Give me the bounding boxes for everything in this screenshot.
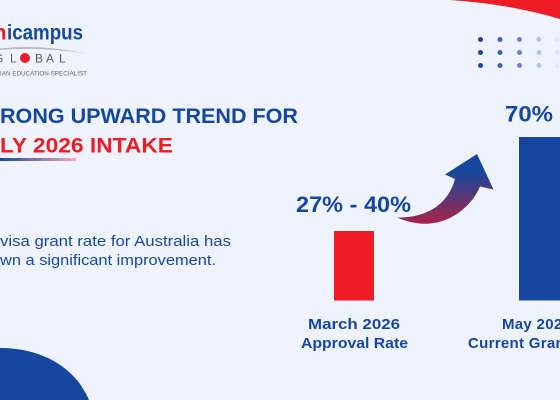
- label: March: [301, 316, 408, 352]
- title line 1: RONG UPWARD TREND FOR: [0, 105, 298, 128]
- body text: [0, 233, 231, 269]
- logo tagline: IAN EDUCATION SPECIALIST: [0, 70, 87, 78]
- body line 2: wn a significant improvement.: [0, 252, 216, 269]
- title underline: [0, 158, 76, 161]
- corner shape: top-right red arc: [450, 0, 560, 19]
- logo swoosh: [0, 47, 86, 54]
- label: March: March 2026: [308, 316, 400, 333]
- label: March: Approval Rate: [301, 335, 408, 352]
- value: March: 27% - 40%: [296, 192, 411, 217]
- logo wordmark: icampus: [7, 22, 83, 44]
- title line 2: LY 2026 INTAKE: [0, 134, 173, 158]
- dot grid: [478, 37, 560, 68]
- corner shape: bottom-left blue circle: [0, 348, 89, 400]
- arrow: [397, 154, 494, 224]
- title: [0, 105, 298, 158]
- logo globe: [20, 53, 30, 63]
- label: May: [468, 316, 560, 352]
- logo: [0, 22, 87, 78]
- value: May: 70%: [505, 102, 553, 126]
- bar: March 2026: [334, 231, 374, 300]
- body line 1: visa grant rate for Australia has: [0, 233, 231, 250]
- bar: May 2026: [519, 137, 560, 300]
